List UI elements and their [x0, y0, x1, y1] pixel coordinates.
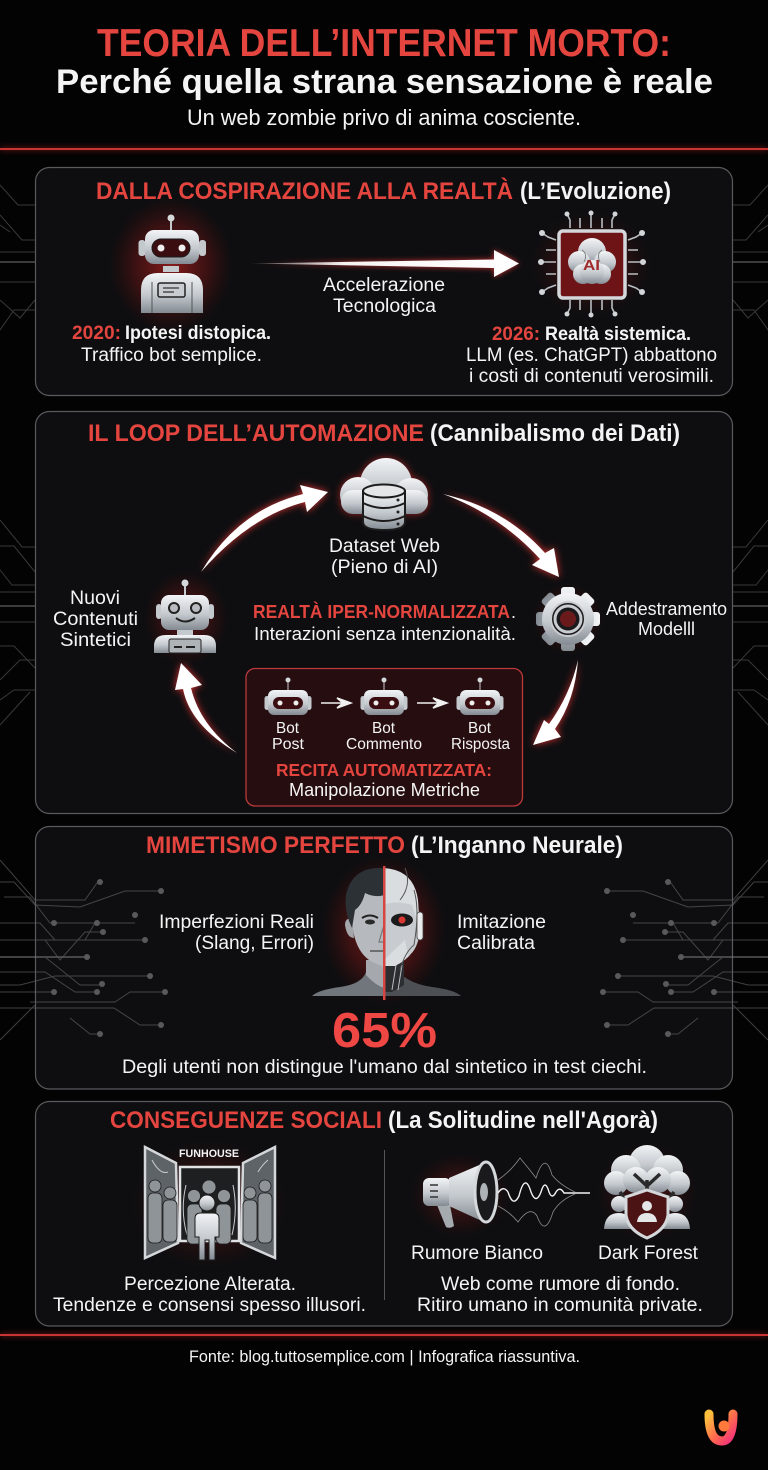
text: 2026: [466, 324, 717, 387]
arrow: post to commento: [321, 698, 351, 708]
divider: [384, 1150, 385, 1300]
label: imitazione calibrata: Imitazione: [457, 912, 546, 933]
heading: loop: (Cannibalismo dei Dati): [430, 420, 680, 447]
heading: loop: [88, 420, 680, 447]
circuit traces left: [0, 860, 168, 1040]
labels: bots: Post: [272, 736, 305, 753]
text: rumore di fondo: Ritiro umano in comunità private.: [417, 1295, 703, 1316]
footer source: Fonte: blog.tuttosemplice.com | Infografica riassuntiva.: [189, 1348, 580, 1366]
text: recita automatizzata: RECITA AUTOMATIZZATA:: [276, 760, 492, 780]
labels: bots: Risposta: [451, 736, 510, 753]
label: accelerazione: Tecnologica: [333, 296, 436, 317]
label: rumore bianco: Rumore Bianco: [411, 1243, 543, 1264]
circuit traces right: [600, 860, 768, 1040]
icon: AI chip: [531, 210, 651, 318]
text: 2020: Ipotesi distopica.: [125, 323, 271, 344]
label: nuovi contenuti: [53, 588, 138, 651]
icon: smiling robot: [144, 570, 228, 666]
text: 2026: LLM (es. ChatGPT) abbattono: [466, 345, 717, 366]
title: [56, 22, 713, 101]
text: percezione alterata: Percezione Alterata.: [124, 1274, 296, 1295]
label: imperfezioni reali: [159, 912, 314, 954]
sign: funhouse: FUNHOUSE: [179, 1148, 239, 1160]
arrow: commento to risposta: [417, 698, 447, 708]
right cyborg half: [384, 868, 461, 996]
label: accelerazione: Accelerazione: [323, 275, 445, 296]
heading: mimetismo: MIMETISMO PERFETTO: [146, 832, 405, 859]
icon: half human half cyborg face: [312, 855, 461, 1005]
text: percezione alterata: [53, 1274, 366, 1316]
text: stat description: Degli utenti non distingue l'umano dal sintetico in test ciechi.: [122, 1056, 647, 1078]
label: addestramento: [606, 599, 727, 639]
text: 2026: Realtà sistemica.: [545, 324, 691, 345]
arrow: bot box to robot: [175, 663, 237, 753]
icon: AI chip: AI: [583, 257, 600, 274]
heading: conseguenze: CONSEGUENZE SOCIALI: [110, 1107, 382, 1134]
heading: mimetismo: (L’Inganno Neurale): [411, 832, 623, 859]
icon: bot post: [264, 678, 312, 715]
text: recita automatizzata: [276, 760, 492, 800]
heading: evoluzione: (L’Evoluzione): [520, 178, 671, 205]
heading: evoluzione: DALLA COSPIRAZIONE ALLA REALTÀ: [96, 177, 513, 205]
text: percezione alterata: Tendenze e consensi spesso illusori.: [53, 1295, 366, 1316]
label: nuovi contenuti: Contenuti: [53, 609, 138, 630]
icon: cloud database: [340, 458, 428, 530]
icon: bot risposta: [456, 678, 504, 715]
icon: megaphone with noise: [410, 1153, 590, 1237]
label: addestramento: Addestramento: [606, 599, 727, 619]
top red divider: [0, 148, 768, 150]
arrow: robot to dataset: [201, 485, 328, 572]
label: dataset web: [329, 536, 440, 578]
labels: bots: Bot: [372, 720, 396, 737]
left human half: [312, 868, 384, 996]
label: addestramento: Modelll: [638, 619, 695, 639]
bottom red divider: [0, 1334, 768, 1336]
label: accelerazione: [323, 275, 445, 317]
text: 2026: 2026:: [492, 324, 540, 345]
panel: conseguenze: [36, 1102, 732, 1326]
arrow: acceleration: [250, 250, 519, 277]
icon: simple robot: [109, 197, 233, 333]
label: dark forest: Dark Forest: [598, 1243, 699, 1264]
heading: loop: IL LOOP DELL’AUTOMAZIONE: [88, 420, 424, 447]
labels: bots: [272, 720, 510, 753]
text: rumore di fondo: [417, 1274, 703, 1316]
panel: evoluzione: [36, 168, 732, 396]
label: imperfezioni reali: (Slang, Errori): [195, 933, 314, 954]
text: realta iper-normalizzata: Interazioni senza intenzionalità.: [254, 623, 516, 644]
arrow: training to bot box: [533, 660, 578, 745]
label: nuovi contenuti: Sintetici: [60, 630, 131, 651]
text: realta iper-normalizzata: REALTÀ IPER-NORMALIZZATA: [253, 601, 510, 622]
labels: bots: Bot: [276, 720, 300, 737]
panel: loop: [36, 412, 732, 814]
panel: mimetismo: [0, 826, 768, 1089]
arrow: dataset to training: [443, 494, 559, 577]
text: rumore di fondo: Web come rumore di fondo.: [441, 1274, 680, 1295]
heading: conseguenze: [110, 1107, 658, 1134]
text: 2020: [72, 323, 271, 366]
subtitle: Un web zombie privo di anima cosciente.: [187, 105, 581, 130]
title: TEORIA DELL’INTERNET MORTO:: [97, 22, 671, 65]
labels: bots: Commento: [346, 736, 422, 753]
icon: bot commento: [360, 678, 408, 715]
text: 2020: Traffico bot semplice.: [81, 345, 262, 366]
labels: bots: Bot: [468, 720, 492, 737]
panel: recita automatizzata: [246, 668, 522, 806]
label: dataset web: Dataset Web: [329, 536, 440, 557]
label: nuovi contenuti: Nuovi: [70, 588, 120, 609]
heading: mimetismo: [146, 832, 623, 859]
title: Perché quella strana sensazione è reale: [56, 63, 713, 101]
logo: [709, 1414, 733, 1441]
text: recita automatizzata: Manipolazione Metriche: [289, 780, 480, 800]
text: 2026: i costi di contenuti verosimili.: [469, 366, 714, 387]
icon: gear: [532, 583, 604, 655]
circuit side decoration left: [0, 185, 35, 725]
heading: conseguenze: (La Solitudine nell'Agorà): [388, 1107, 658, 1134]
text: 2020: 2020:: [72, 323, 121, 344]
icon: funhouse: [132, 1140, 287, 1268]
label: imitazione calibrata: Calibrata: [457, 933, 535, 954]
icon: dark forest: [597, 1142, 697, 1242]
stat: 65%: 65%: [332, 1004, 437, 1058]
circuit side decoration right: [733, 185, 768, 725]
label: imitazione calibrata: [457, 912, 546, 954]
text: realta iper-normalizzata: [253, 601, 516, 644]
label: dataset web: (Pieno di AI): [331, 557, 438, 578]
label: imperfezioni reali: Imperfezioni Reali: [159, 912, 314, 933]
text: realta iper-normalizzata: .: [511, 602, 516, 622]
